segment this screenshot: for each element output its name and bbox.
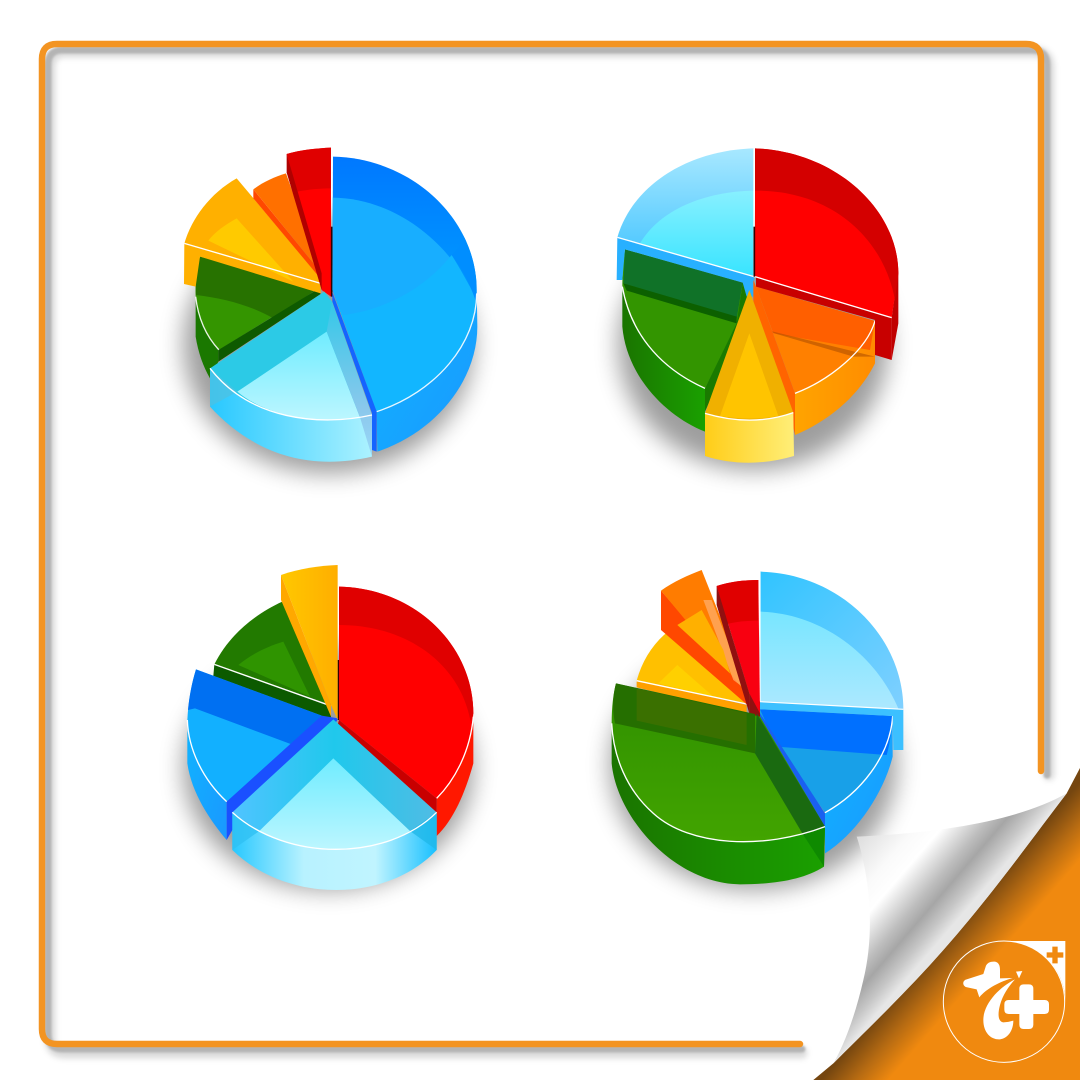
pie chart: bottom right: [610, 570, 903, 890]
slice: light blue: [617, 148, 754, 297]
slice: orange: [253, 173, 322, 280]
slice: light blue: [210, 292, 372, 462]
slice: orange: [753, 280, 875, 435]
slice: yellow: [637, 625, 747, 715]
pie chart: bottom left: [183, 565, 473, 890]
badge circle: [943, 941, 1065, 1062]
slice: light blue: [760, 572, 903, 750]
slice: yellow exploded: [281, 565, 338, 720]
logo mark: [963, 962, 1049, 1039]
badge corner with plus: [1004, 941, 1065, 1002]
page curl corner: [813, 768, 1080, 1080]
slice: red: [287, 148, 332, 297]
pie chart: top right: [617, 148, 898, 470]
slice: red: [337, 587, 473, 836]
slice: green: [622, 249, 750, 432]
pie chart: top left: [183, 148, 480, 473]
slice: large green: [612, 683, 825, 884]
slice: red: [754, 148, 898, 360]
slice: green: [213, 602, 331, 722]
orange corner background: [813, 768, 1080, 1080]
slice: large blue: [332, 157, 480, 452]
slice: blue: [187, 669, 338, 840]
slice: blue: [760, 709, 893, 853]
curled page: [833, 793, 1067, 1063]
slice: orange: [661, 570, 749, 707]
slice: red: [717, 580, 760, 720]
slice: amber: [184, 178, 321, 293]
slice: green: [196, 257, 321, 378]
slice: yellow exploded: [705, 290, 794, 463]
slice: light blue: [232, 719, 437, 890]
